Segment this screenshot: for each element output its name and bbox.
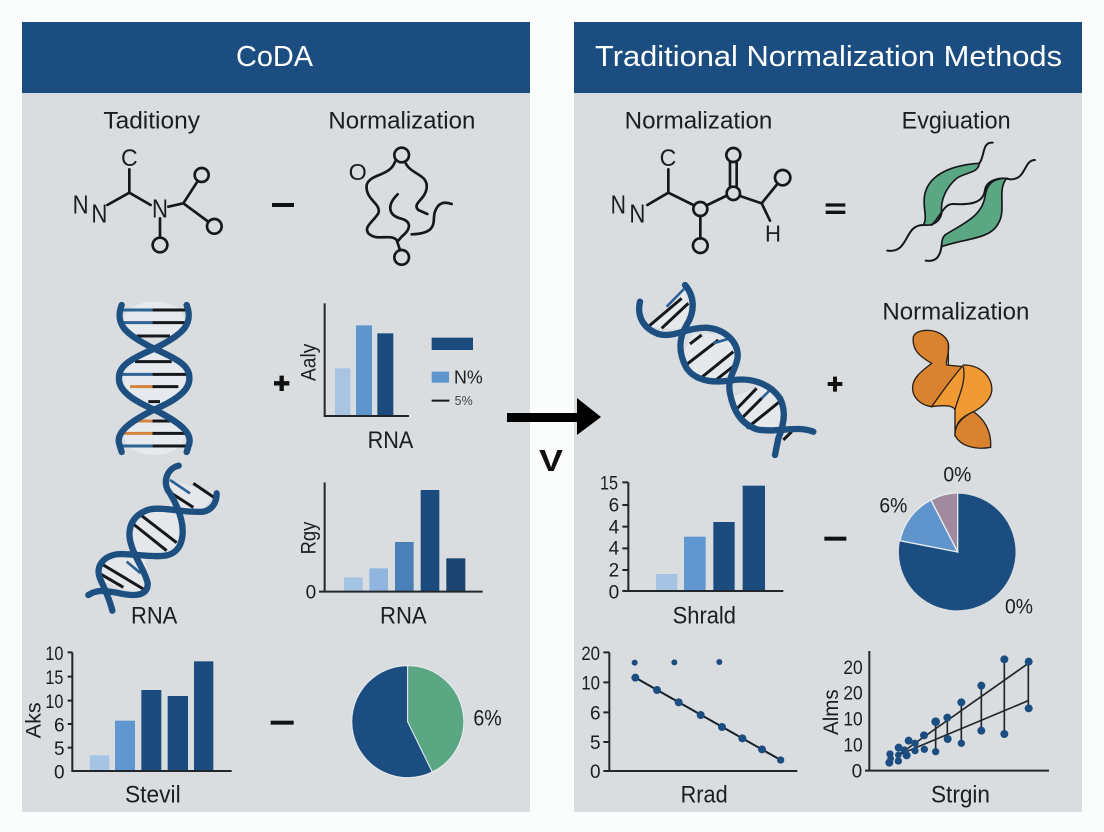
bar chart: Aaly by RNA: RNA (368, 427, 413, 454)
legend: 5% (455, 394, 473, 408)
icon: diagonal DNA helix (88, 466, 217, 611)
bar chart: Rgy by RNA: 0 (306, 583, 316, 604)
bar chart: Stevil: 6 (54, 715, 65, 736)
bar chart: Stevil: Stevil (125, 782, 181, 809)
icon: folded chain (349, 148, 452, 265)
operator: minus (272, 203, 294, 207)
label: Normalization: Normalization (328, 107, 475, 134)
pie chart: left: 6% (473, 706, 502, 731)
scatter chart: Rrad: Rrad (681, 781, 728, 808)
operator: plus (828, 377, 842, 392)
icon: molecule right: H (765, 220, 781, 246)
panel: CoDA (22, 22, 530, 812)
bar chart: Shrald (600, 473, 783, 629)
operator: minus (271, 721, 294, 725)
bar chart: Stevil: 10 (45, 644, 63, 665)
heading: CoDA (22, 22, 530, 93)
bar chart: Stevil: 5 (54, 739, 65, 760)
label: Taditiony: Taditiony (103, 107, 200, 134)
scatter chart: Strgin: 10 (843, 710, 863, 731)
scatter chart: Strgin (819, 651, 1049, 808)
bar chart: Shrald: 0 (609, 582, 619, 603)
bar chart: Stevil: 0 (54, 762, 65, 783)
bar chart: Rgy by RNA (297, 482, 483, 629)
operator: equals (826, 203, 845, 214)
label: RNA left: RNA (131, 602, 177, 629)
icon: molecule left: N (73, 191, 89, 219)
bar chart: Shrald: Shrald (673, 602, 736, 629)
bar chart: Shrald: 4 (609, 517, 619, 538)
label: V: V (539, 443, 563, 478)
bar chart: Aaly by RNA (297, 303, 483, 454)
pie chart: left (352, 666, 502, 778)
arrow: between panels (507, 398, 601, 435)
heading: Traditional Normalization Methods (574, 22, 1082, 93)
icon: slanted DNA helix (639, 285, 813, 455)
heading: Traditional Normalization Methods: Traditional Normalization Methods (595, 41, 1062, 73)
label: Evgiuation: Evgiuation (902, 107, 1011, 134)
scatter chart: Rrad: 20 (581, 644, 600, 665)
pie chart: right: 0% (943, 463, 971, 487)
icon: molecule right: N (611, 191, 626, 219)
pie chart: right: 0% (1005, 594, 1033, 618)
legend: N% (454, 366, 483, 387)
scatter chart: Strgin: Strgin (931, 781, 990, 808)
scatter chart: Strgin: 10 (843, 736, 863, 757)
icon: green ribbons (887, 143, 1035, 261)
icon: folded chain: O (349, 159, 367, 185)
bar chart: Shrald: 6 (609, 496, 619, 517)
scatter chart: Rrad: 0 (590, 762, 601, 783)
scatter chart: Strgin: Alms (819, 689, 843, 735)
scatter chart: Strgin: 0 (852, 762, 862, 783)
bar chart: Aaly by RNA: Aaly (297, 343, 321, 381)
bar chart: Rgy by RNA: Rgy (297, 521, 321, 554)
icon: molecule left: N (91, 200, 107, 228)
icon: molecule right: C (660, 145, 676, 172)
bar chart: Rgy by RNA: RNA (380, 602, 427, 629)
bar chart: Stevil: Aks (22, 702, 46, 738)
label: Normalization upper right: Normalization (882, 298, 1029, 325)
icon: orange folded protein (913, 330, 992, 448)
icon: molecule right (611, 145, 790, 253)
scatter chart: Strgin: 20 (843, 658, 863, 679)
bar chart: Stevil (22, 644, 232, 809)
operator: plus (274, 376, 289, 391)
bar chart: Stevil: 10 (45, 692, 63, 713)
panel: Traditional Normalization Methods (574, 22, 1082, 812)
bar chart: Shrald: 2 (609, 560, 619, 581)
scatter chart: Rrad: 6 (590, 703, 601, 724)
heading: CoDA: CoDA (236, 41, 314, 73)
scatter chart: Rrad: 10 (581, 673, 600, 694)
icon: molecule left: C (121, 145, 138, 172)
pie chart: right: 6% (879, 494, 907, 518)
bar chart: Stevil: 15 (45, 668, 63, 689)
bar chart: Shrald: 15 (600, 473, 618, 494)
operator: minus (824, 537, 846, 541)
scatter chart: Rrad (581, 644, 797, 808)
scatter chart: Rrad: 5 (590, 733, 601, 754)
bar chart: Shrald: 4 (609, 539, 619, 560)
legend (432, 338, 483, 408)
icon: vertical DNA helix (119, 302, 190, 455)
scatter chart: Strgin: 20 (843, 683, 863, 704)
pie chart: right (879, 463, 1033, 618)
icon: molecule right: N (629, 200, 645, 228)
icon: molecule left: N (152, 195, 168, 223)
icon: molecule left (73, 145, 222, 252)
label: Normalization: Normalization (625, 107, 772, 134)
